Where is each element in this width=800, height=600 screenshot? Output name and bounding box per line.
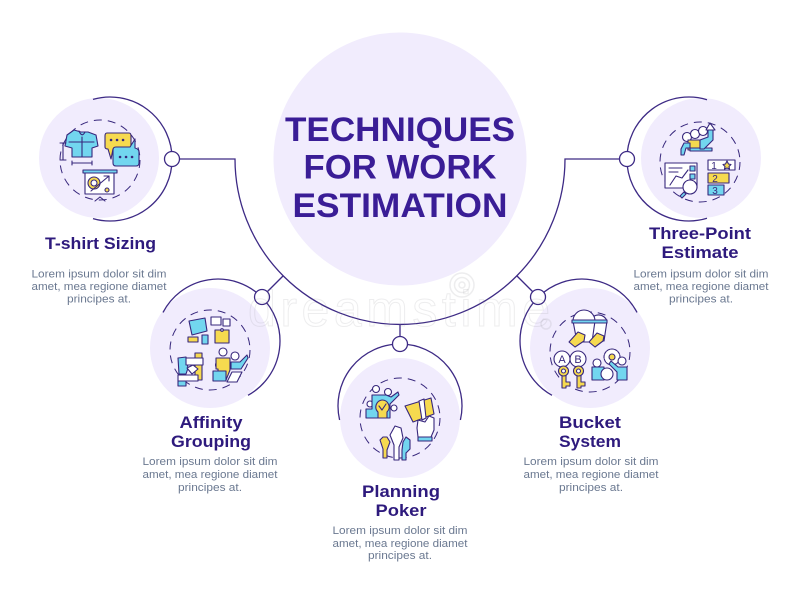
label: Bucket System: System [559,433,621,451]
text block: Affinity Grouping description: amet, mea regione diamet [142,469,278,481]
text block: Three-Point Estimate description [634,268,769,306]
text block: Bucket System description: Lorem ipsum dolor sit dim [524,456,658,468]
icon: sticky notes, joined hands and team [178,317,248,386]
text block: Bucket System description: principes at. [559,482,623,494]
label: Bucket System [559,414,622,451]
label: Affinity Grouping [171,414,251,451]
text block: Affinity Grouping description: principes at. [178,482,242,494]
icon: t-shirt, speech bubbles and target board [60,130,139,201]
text block: Affinity Grouping description [142,456,278,494]
label: Affinity Grouping: Grouping [171,433,251,451]
title: TECHNIQUES [285,111,515,149]
text block: Three-Point Estimate description: amet, mea regione diamet [634,281,769,293]
text: dreamstime [248,281,550,337]
text block: T-shirt Sizing description: amet, mea regione diamet [32,281,167,293]
text block: T-shirt Sizing description: Lorem ipsum dolor sit dim [32,268,166,280]
text block: Three-Point Estimate description: principes at. [669,294,733,306]
icon: team growth, chart and ranking: 2 [712,174,718,185]
icon: team growth, chart and ranking: 1 [711,161,717,172]
icon: buckets, keys and person with gears [554,310,627,388]
icon: team growth, chart and ranking [665,123,735,198]
icon: team growth, chart and ranking: 3 [712,186,718,197]
title: ESTIMATION [292,187,508,225]
label: T-shirt Sizing: T-shirt Sizing [45,235,156,253]
text block: Bucket System description [524,456,659,494]
label: Three-Point Estimate [649,225,752,262]
icon: buckets, keys and person with gears: A [558,354,566,366]
label: Affinity Grouping: Affinity [180,414,243,432]
panel: T-shirt Sizing [39,97,180,221]
label: Three-Point Estimate: Three-Point [649,225,752,243]
label: Planning Poker [362,483,440,520]
label: Bucket System: Bucket [559,414,622,432]
text block: Planning Poker description: Lorem ipsum dolor sit dim [332,525,468,537]
title: FOR WORK [304,148,497,186]
icon: buckets, keys and person with gears: B [574,354,582,366]
text block: Planning Poker description [332,525,468,562]
label: Planning Poker: Planning [362,483,440,501]
panel: Affinity Grouping [150,279,280,408]
title [285,111,515,225]
icon: team with bulb, cards and raised hands [366,386,434,460]
panel: Planning Poker [338,336,462,478]
text block: Planning Poker description: principes at. [368,550,432,562]
text block: T-shirt Sizing description: principes at. [67,294,131,306]
text block: T-shirt Sizing description [32,268,167,306]
panel: Three-Point Estimate [620,97,761,221]
text block: Three-Point Estimate description: Lorem ipsum dolor sit dim [634,268,768,280]
connector lines [180,159,620,337]
panel: Bucket System [520,279,650,408]
label: Three-Point Estimate: Estimate [662,244,738,262]
label: Planning Poker: Poker [376,502,427,520]
text block: Planning Poker description: amet, mea regione diamet [332,538,468,550]
text block: Bucket System description: amet, mea regione diamet [524,469,659,481]
panel: central title circle [274,32,526,286]
text block: Affinity Grouping description: Lorem ipsum dolor sit dim [142,456,278,468]
